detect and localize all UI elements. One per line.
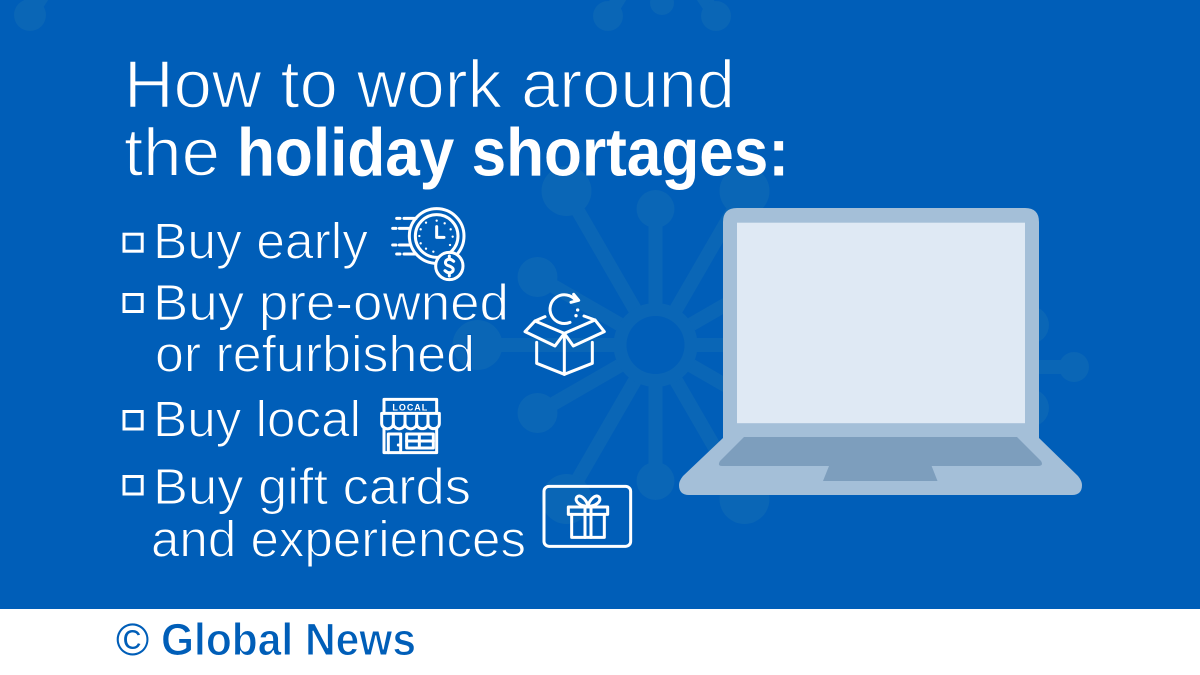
title [124,47,789,191]
footer credit: © [116,614,149,665]
footer strip [0,609,1200,675]
bullet: buy early [124,234,142,251]
text: buy gift cards and experiences: and experiences [151,511,526,568]
title: How to work around [124,47,735,122]
bullet: buy local [124,412,142,429]
footer credit: Global News [161,614,416,665]
text: buy pre-owned or refurbished: Buy pre-owned [153,274,509,331]
bullet: buy pre-owned [124,294,142,312]
title: the [124,116,220,191]
background network snowflake [14,0,1089,524]
icon: gift card [544,486,631,546]
bullet: buy gift cards [124,476,142,494]
text: buy gift cards and experiences [151,458,526,568]
icon: clock with dollar coin [393,209,464,280]
text: buy pre-owned or refurbished [153,274,509,383]
text: buy local: Buy local [153,391,361,448]
laptop body [679,208,1082,495]
icon: local storefront [382,399,439,453]
title: holiday shortages: [237,116,789,191]
laptop screen [737,223,1025,423]
text: buy gift cards and experiences: Buy gift cards [153,458,471,515]
keyboard and trackpad [719,437,1042,481]
laptop illustration [679,208,1082,495]
text: buy pre-owned or refurbished: or refurbished [155,326,475,383]
icon: local storefront: LOCAL [392,402,428,412]
text: buy early: Buy early [153,212,369,269]
icon: open box with refresh arrow [525,294,604,374]
